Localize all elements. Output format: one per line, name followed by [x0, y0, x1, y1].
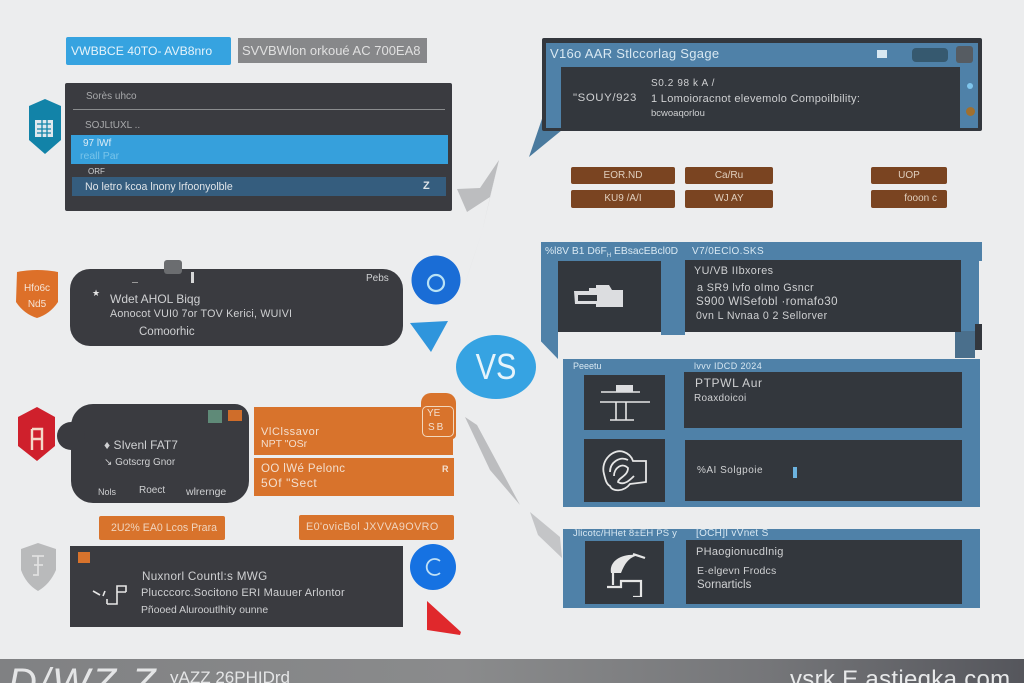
panel: right stacked frame: Peeetu: [573, 361, 602, 371]
list row label: ORF: [88, 167, 105, 176]
brown tag: KU9 /A/I: [604, 193, 642, 204]
orange label: left: [99, 516, 225, 540]
panel: right middle frame: [541, 242, 982, 359]
panel: left list: [65, 83, 452, 211]
icon: small glyph: [92, 585, 127, 605]
content box: [561, 67, 960, 128]
panel: right bottom frame: [OCH]I vVnet S: [696, 528, 769, 539]
frame middle strip: [661, 261, 685, 335]
orange block: lower: [254, 458, 454, 496]
icon box: table: [584, 375, 665, 430]
brown tag: UOP: [898, 170, 920, 181]
icon: red triangle: [427, 601, 461, 635]
icon: gray shield: [21, 543, 56, 591]
orange label: right: [299, 515, 454, 540]
orange block: lower: OO lWé Pelonc: [261, 463, 345, 475]
brown tag: Ca/Ru: [715, 170, 743, 181]
frame header: %l8V B1 D6FH EBsacEBcl0D: [545, 246, 678, 259]
text box: second row: [685, 440, 962, 501]
frame header: V7/0EClO.SKS: [692, 246, 764, 257]
icon: orange shield: Nd5: [28, 299, 47, 310]
text box: YU/VB IIbxores: [694, 265, 773, 277]
text box: Sornarticls: [697, 579, 751, 591]
orange label: right: E0'ovicBol JXVVA9OVRO: [306, 521, 439, 533]
icon box: hand: [584, 439, 665, 502]
brown tags: [571, 167, 675, 184]
frame right side: [961, 261, 979, 336]
panel: right bottom frame: Jlicotc/HHet 8±EH PS y: [573, 528, 677, 539]
text box: [686, 540, 962, 604]
left header tab: blue: VWBBCE 40TO- AVB8nro: [71, 44, 212, 58]
panel: right top: [542, 38, 982, 131]
brown tags: EOR.ND: [604, 170, 642, 181]
panel: left tab card: ♦ SIvenl FAT7: [104, 438, 178, 452]
brown tag: [871, 167, 947, 184]
vs badge: VS: [476, 346, 516, 387]
panel: left rounded card: Comoorhic: [139, 326, 195, 338]
text box: a SR9 lvfo oImo Gsncr: [697, 282, 814, 294]
icon: lamp glyph: [607, 553, 646, 597]
icon: teal shield: [29, 99, 61, 154]
icon: table glyph: [600, 385, 650, 421]
content box: "SOUY/923: [573, 92, 637, 104]
icon: orange tag: SB: [428, 422, 445, 433]
list heading: Sorès uhco: [86, 91, 137, 102]
list row: dark blue: Z: [423, 180, 430, 192]
panel: right bottom frame: [563, 529, 980, 608]
icon: orange tag: YE: [427, 408, 440, 419]
panel: left rounded card: Wdet AHOL Biqg: [110, 292, 200, 306]
panel: left rounded card: Pebs: [366, 273, 389, 284]
panel: left bottom card: Nuxnorl Countl:s MWG: [142, 570, 268, 583]
panel: left rounded card: ★: [92, 288, 100, 298]
arrow: upper gray connector: [457, 160, 499, 290]
frame stub: [955, 331, 975, 358]
text box: 0vn L Nvnaa 0 2 Sellorver: [696, 310, 828, 322]
left header tab: gray: [238, 38, 427, 63]
panel: right stacked frame: [563, 359, 980, 507]
text box: second row: %AI Solgpoie: [697, 465, 763, 476]
text box: PHaogionucdlnig: [696, 546, 784, 558]
icon: blue triangle: [410, 321, 448, 352]
content box: bcwoaqorlou: [651, 108, 705, 119]
panel: left tab card: Roect: [139, 485, 165, 496]
panel: left rounded card: [70, 269, 403, 346]
panel: left tab card: [71, 404, 249, 503]
icon: folder glyph: [574, 285, 623, 307]
card clip: [164, 260, 182, 274]
text box: S900 WlSefobl ·romafo30: [696, 295, 838, 308]
text box: first row: Roaxdoicoi: [694, 393, 746, 404]
list row: plain: SOJLtUXL ..: [85, 120, 140, 131]
panel: right top: V16o AAR Stlccorlag Sgage: [550, 46, 719, 61]
brown tag: [685, 167, 773, 184]
text box: E·elgevn Frodcs: [697, 565, 776, 577]
icon: blue circle: [412, 256, 460, 304]
card slot mark: [191, 272, 194, 283]
orange block: upper: [254, 407, 453, 455]
list row: highlighted blue: 97 lWf: [83, 138, 111, 149]
vs badge: [456, 335, 536, 399]
brown tag: fooon c: [904, 193, 937, 204]
content box: S0.2 98 k A /: [651, 78, 715, 89]
side dots: [967, 83, 973, 89]
orange block: upper: VlClssavor: [261, 426, 320, 438]
arrow: top panel tail: [529, 110, 562, 157]
text box: [685, 260, 961, 332]
list row: dark blue: [72, 177, 446, 196]
brown tag: [571, 190, 675, 208]
brown tag: [871, 190, 947, 208]
icon: orange tag: [421, 393, 456, 439]
icon box: [585, 541, 664, 604]
list row: highlighted blue: [71, 135, 448, 164]
list row: dark blue: No letro kcoa lnony lrfoonyolble: [85, 181, 233, 193]
brown tag: WJ AY: [714, 193, 744, 204]
list row: highlighted blue: reall Par: [80, 150, 119, 162]
text box: first row: PTPWL Aur: [695, 376, 763, 390]
panel: left tab card: wlrernge: [186, 486, 226, 498]
header controls: [912, 48, 948, 62]
content box: 1 Lomoioracnot elevemolo Compoilbility:: [651, 93, 860, 105]
panel: left bottom card: Plucccorc.Socitono ERI Mauuer Arlontor: [141, 587, 345, 599]
footer band: [0, 659, 1024, 683]
orange block: lower: R: [442, 464, 448, 474]
icon: hand glyph: [602, 450, 647, 492]
panel: left bottom card: [70, 546, 403, 627]
icon: red shield: [18, 407, 55, 461]
brown tag: [685, 190, 773, 208]
panel: right stacked frame: lvvv IDCD 2024: [694, 361, 762, 371]
icon: blue c circle: [410, 544, 456, 590]
arrow: lower gray connector: [465, 417, 562, 558]
orange block: lower: 5Of "Sect: [261, 476, 317, 490]
left header tab: gray: SVVBWlon orkoué AC 700EA8: [242, 43, 420, 58]
frame header: [541, 242, 982, 261]
text box: first row: [684, 372, 962, 428]
orange block: upper: NPT "OSr: [261, 438, 307, 450]
orange label: left: 2U2% EA0 Lcos Prara: [111, 522, 217, 534]
panel: left rounded card: Aonocot VUI0 7or TOV Kerici, WUIVI: [110, 308, 292, 320]
icon box: [558, 261, 661, 332]
icon: orange shield: [16, 270, 58, 318]
left header tab: blue: [66, 37, 231, 65]
header bar: [546, 43, 978, 128]
frame left side: [541, 261, 558, 359]
panel: left tab card: ↘ Gotscrg Gnor: [104, 457, 175, 468]
panel: left bottom card: Pñooed Alurooutlhity ounne: [141, 605, 268, 616]
icon: orange shield: Hfo6c: [24, 283, 50, 294]
panel: left tab card: Nols: [98, 487, 116, 497]
